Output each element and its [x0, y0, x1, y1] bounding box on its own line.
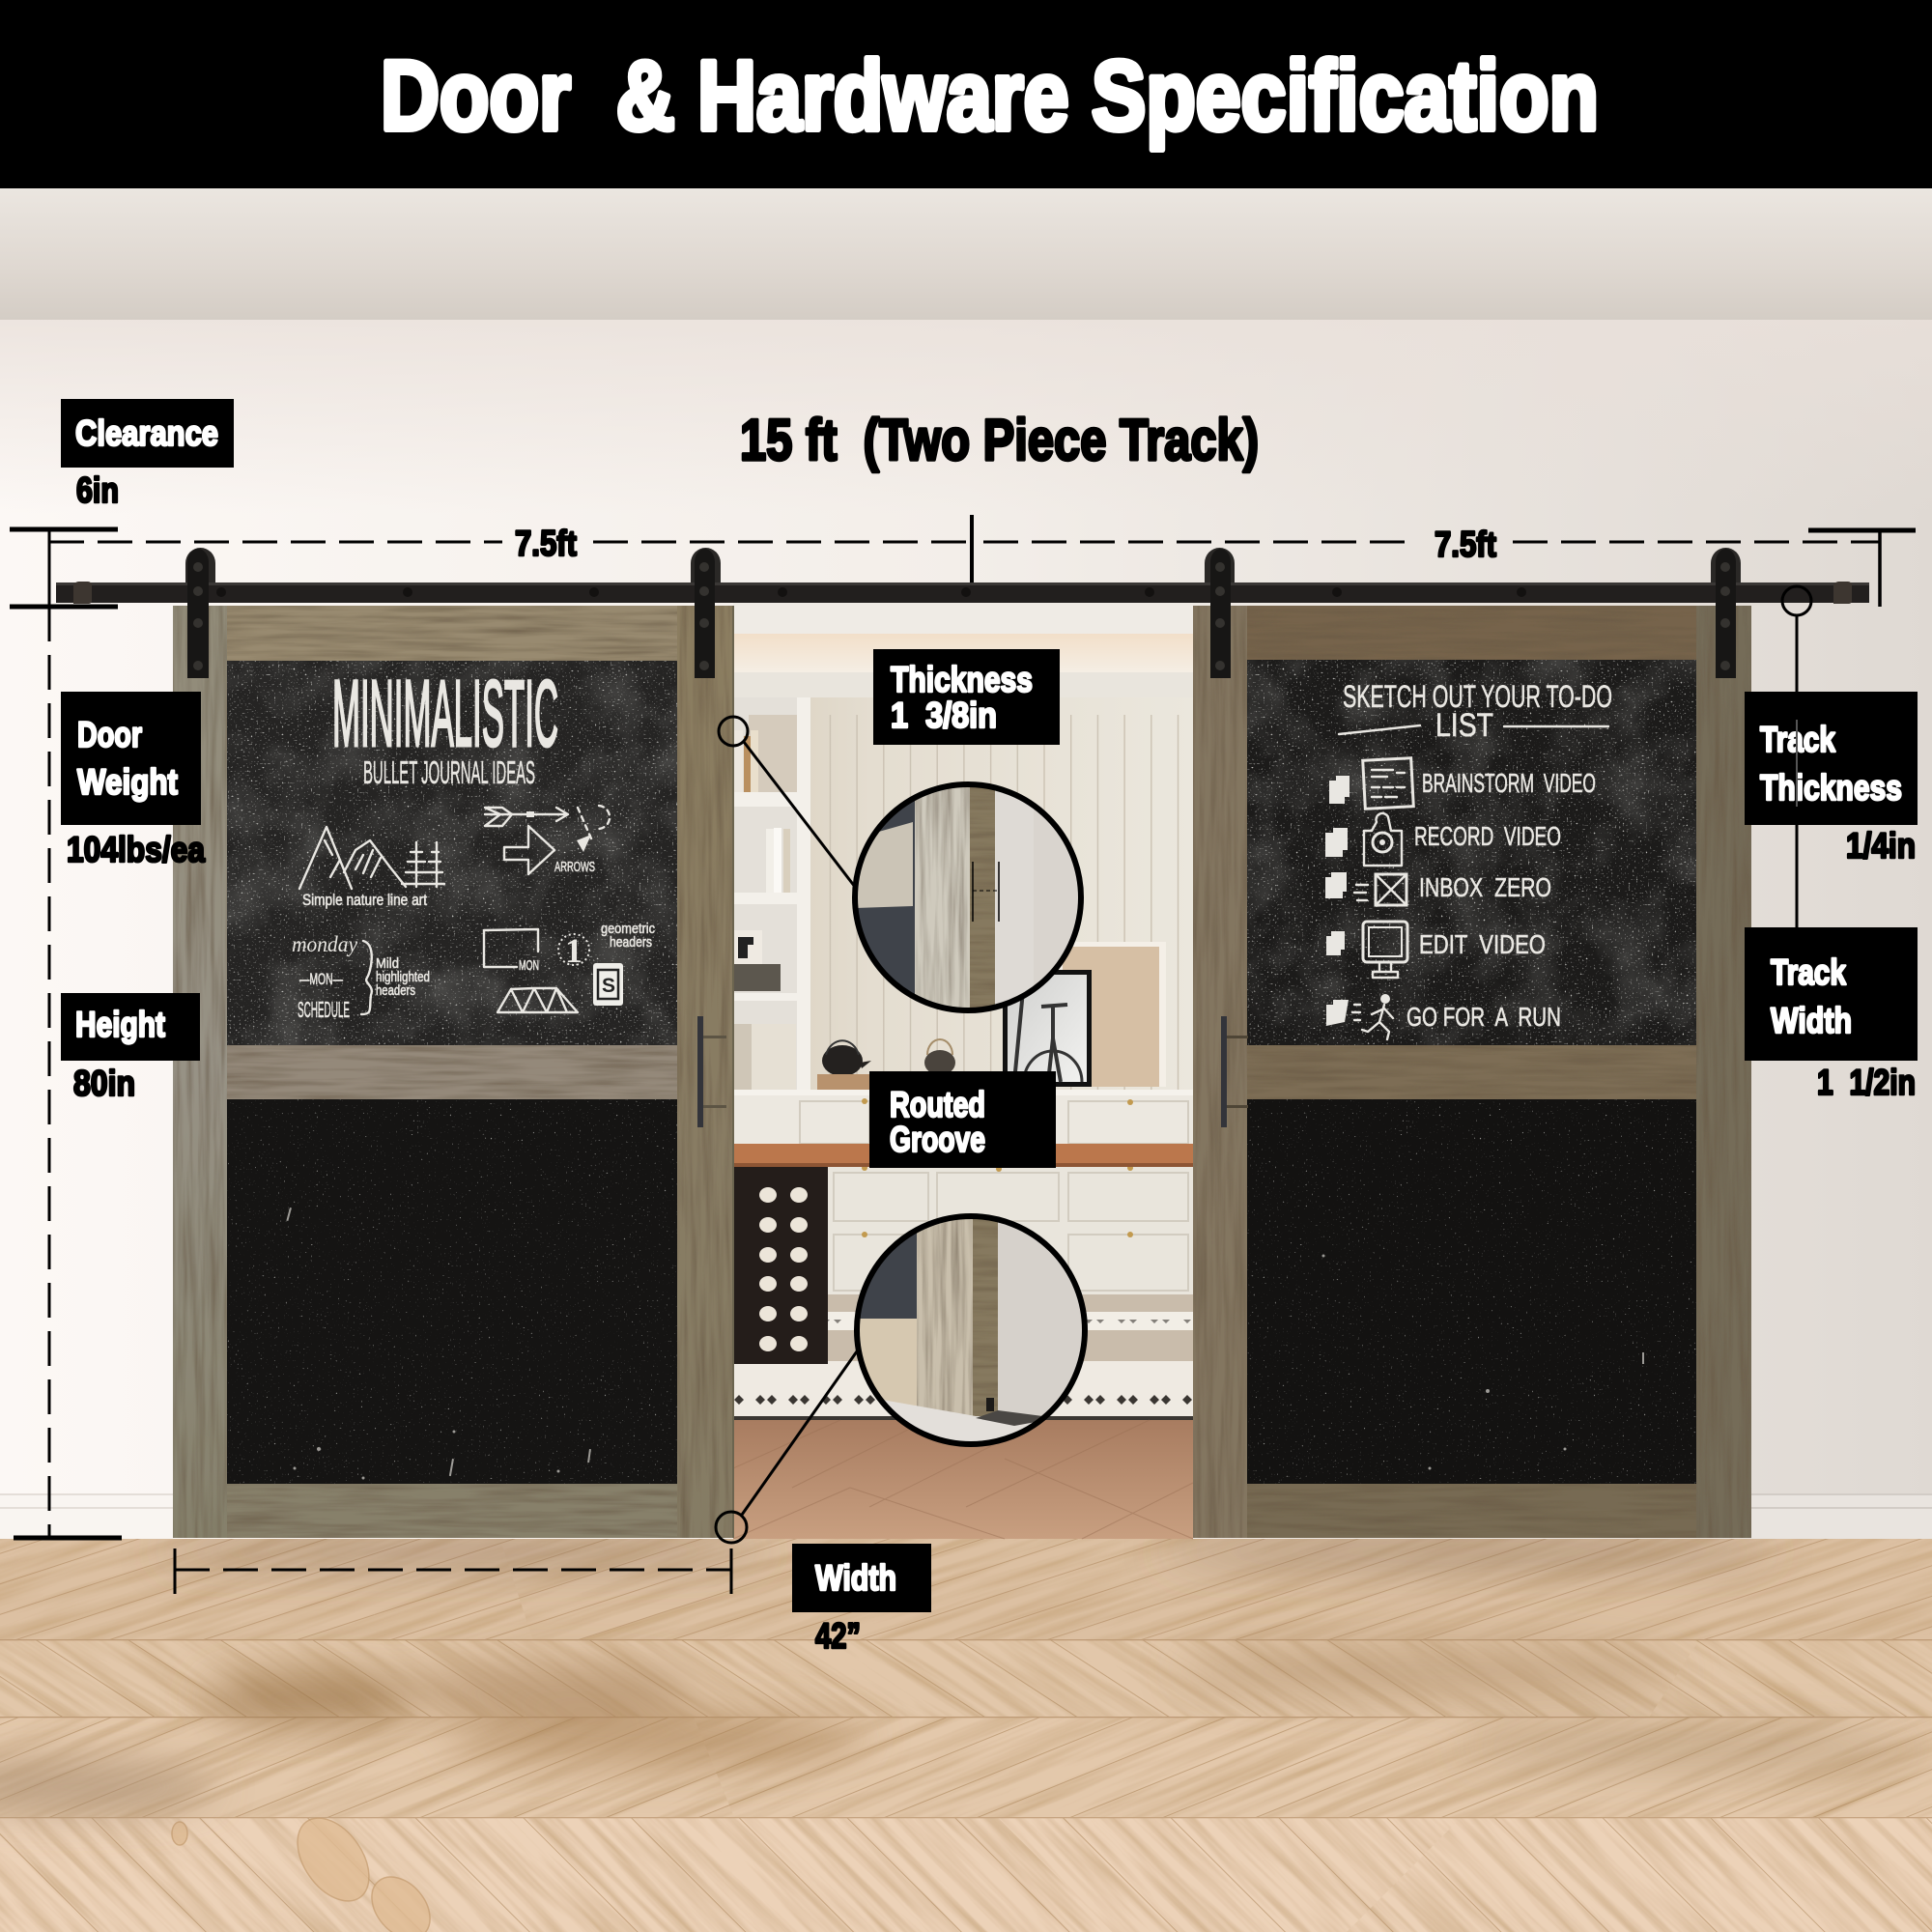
- barn door track with hangers: [56, 548, 1869, 678]
- chalk drawings: sketch out your to-do list: GO FOR A RUN: [1406, 1002, 1561, 1032]
- label: thickness: Thickness: [891, 660, 1033, 699]
- label: door weight: Door: [77, 715, 142, 754]
- chalk drawings: minimalistic bullet journal ideas: MON: [519, 957, 539, 974]
- door width dimension line: [175, 1548, 731, 1594]
- hanger straps and wheels: [185, 548, 1741, 678]
- label: track thickness: 1/4in: [1846, 826, 1916, 866]
- icon: runner: [1352, 994, 1393, 1039]
- chalk drawings: minimalistic bullet journal ideas: BULLET JOURNAL IDEAS: [363, 754, 535, 790]
- callout: routed groove magnifier: [716, 1215, 1087, 1543]
- label: width: 42”: [815, 1616, 861, 1656]
- callout: door thickness magnifier: [719, 717, 1087, 1016]
- label: thickness: 1 3/8in: [891, 696, 997, 735]
- artwork leaning on the back wall: [1003, 942, 1166, 1087]
- chalk drawings: minimalistic bullet journal ideas: [292, 661, 655, 1022]
- door handles: [697, 1016, 1248, 1127]
- label: width: Width: [815, 1558, 896, 1598]
- label: door weight: Weight: [77, 762, 178, 802]
- overall track length heading: 15 ft (Two Piece Track): [740, 408, 1259, 472]
- chalk drawings: minimalistic bullet journal ideas: Simple nature line art: [302, 891, 427, 909]
- callout pointer: track thickness: [1782, 586, 1811, 927]
- icon: monitor: [1363, 922, 1407, 978]
- label: routed groove: Groove: [890, 1120, 985, 1159]
- label: track width: Track: [1771, 952, 1846, 992]
- label: routed groove: [869, 1071, 1056, 1168]
- icon: inbox envelope: [1354, 874, 1406, 905]
- label: height: Height: [75, 1005, 165, 1044]
- track dimension lines with 7.5ft labels: 7.5ft: [515, 524, 577, 563]
- left barn door: [173, 606, 734, 1538]
- track end stops: [73, 582, 1852, 604]
- chalk drawings: minimalistic bullet journal ideas: SCHEDULE: [298, 997, 350, 1022]
- chalk drawings: sketch out your to-do list: INBOX ZERO: [1419, 872, 1551, 902]
- chalk drawings: minimalistic bullet journal ideas: ARROWS: [554, 859, 595, 875]
- label: clearance: [61, 399, 234, 510]
- herringbone wood floor: [0, 1539, 1932, 1932]
- icon: brainstorm board: [1363, 758, 1413, 809]
- chalk drawings: minimalistic bullet journal ideas: Mild: [376, 955, 399, 972]
- clearance bracket: [10, 529, 118, 607]
- door height dimension line: [14, 607, 122, 1538]
- label: door weight: [61, 692, 205, 869]
- label: track thickness: Track: [1760, 720, 1835, 759]
- label: track width: [1745, 927, 1918, 1102]
- icon: camera: [1364, 813, 1402, 866]
- chalk drawings: minimalistic bullet journal ideas: MINIMALISTIC: [332, 661, 558, 766]
- chalk scratches on the lower panels: [286, 1208, 1644, 1480]
- title banner: [0, 0, 1932, 188]
- soft shadows on the floor: [0, 1540, 1922, 1810]
- chalk drawings: minimalistic bullet journal ideas: headers: [376, 982, 415, 999]
- chalk drawings: sketch out your to-do list: [1325, 679, 1612, 1039]
- label: routed groove: Routed: [890, 1085, 985, 1124]
- chalk drawings: sketch out your to-do list: SKETCH OUT YOUR TO-DO: [1343, 679, 1612, 714]
- room background: ceiling and wall: [0, 188, 1932, 1542]
- chalk drawings: sketch out your to-do list: LIST: [1435, 707, 1493, 744]
- interior room seen through the doorway: [733, 603, 1193, 1539]
- label: door weight: 104lbs/ea: [67, 830, 205, 869]
- chalk drawings: sketch out your to-do list: EDIT VIDEO: [1419, 929, 1546, 959]
- label: clearance: Clearance: [75, 413, 218, 453]
- chalk drawings: minimalistic bullet journal ideas: geometric: [601, 921, 655, 937]
- chalk drawings: minimalistic bullet journal ideas: monday: [292, 932, 358, 956]
- label: height: 80in: [73, 1064, 135, 1103]
- chalk drawings: sketch out your to-do list: RECORD VIDEO: [1414, 821, 1561, 851]
- right barn door: [1193, 606, 1751, 1538]
- label: height: [61, 993, 200, 1103]
- chalk drawings: minimalistic bullet journal ideas: S: [602, 975, 615, 997]
- chalk drawings: minimalistic bullet journal ideas: 1: [565, 931, 582, 970]
- teapots on the counter: [817, 1039, 959, 1090]
- label: track width: Width: [1771, 1001, 1852, 1040]
- track dimension lines with 7.5ft labels: [49, 515, 1879, 582]
- perforated black desk leg: [734, 1167, 828, 1364]
- track dimension lines with 7.5ft labels: 7.5ft: [1435, 525, 1496, 564]
- chalk drawings: minimalistic bullet journal ideas: —MON—: [299, 970, 343, 988]
- right track end bracket: [1808, 530, 1916, 607]
- label: clearance: 6in: [76, 470, 119, 510]
- label: width: [792, 1544, 931, 1656]
- chalk drawings: minimalistic bullet journal ideas: headers: [610, 934, 652, 951]
- chalk drawings: minimalistic bullet journal ideas: highlighted: [376, 969, 430, 985]
- title banner: Door & Hardware Specification: [381, 41, 1599, 151]
- chalk drawings: sketch out your to-do list: BRAINSTORM VIDEO: [1422, 768, 1596, 798]
- label: thickness: [873, 649, 1060, 745]
- label: track thickness: Thickness: [1760, 768, 1902, 808]
- label: track thickness: [1745, 692, 1918, 866]
